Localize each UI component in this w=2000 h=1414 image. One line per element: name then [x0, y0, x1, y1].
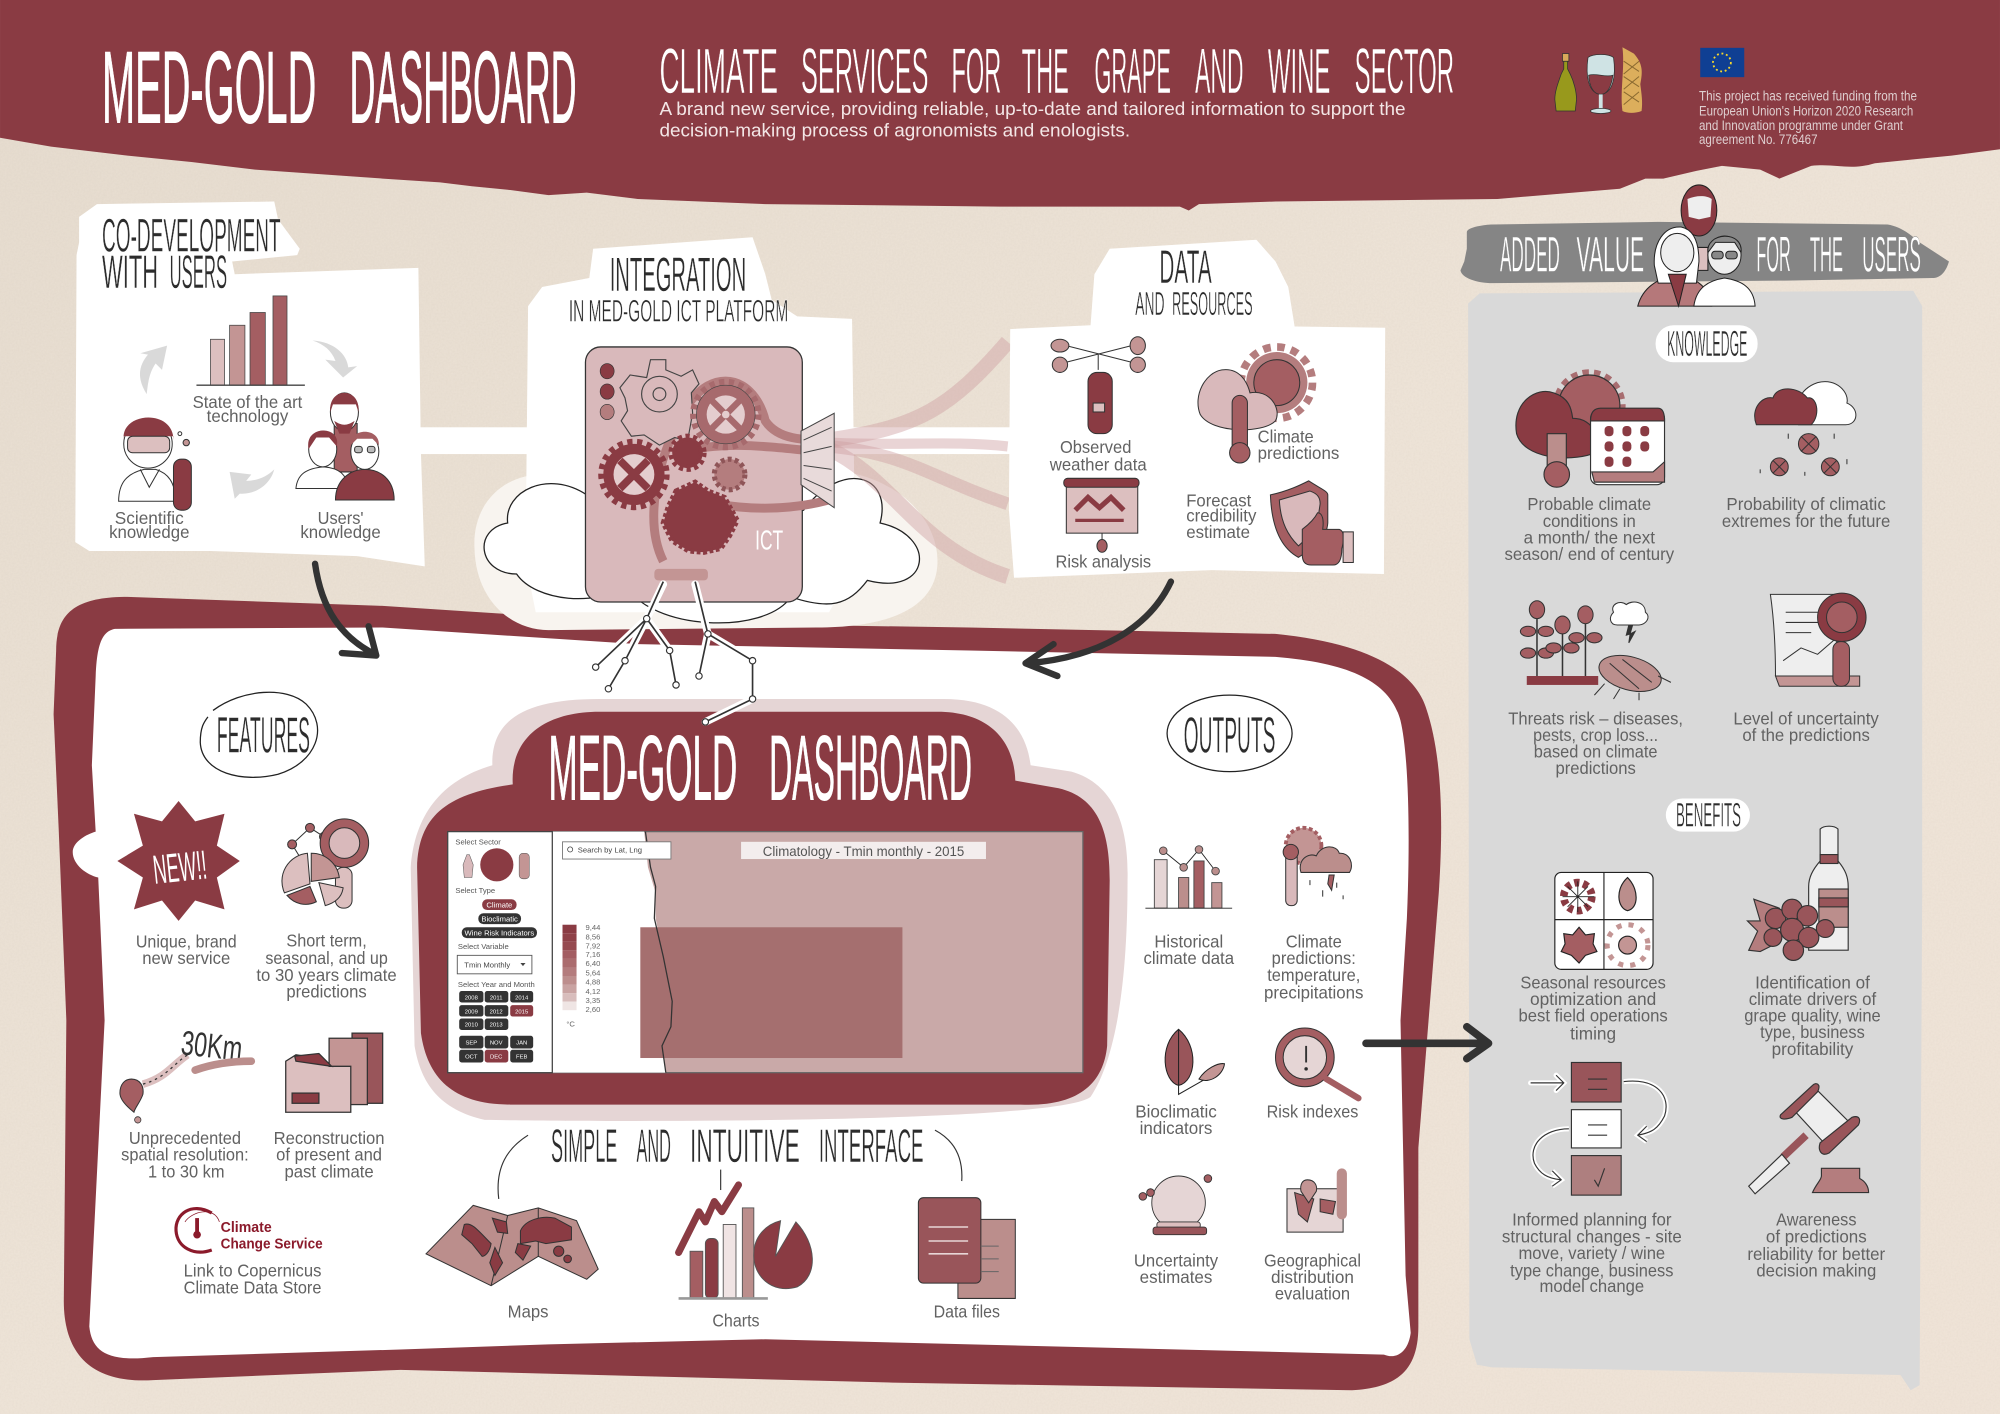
- panel: co-development with users: [75, 202, 425, 566]
- knowledge labels: Probable climate: [1527, 494, 1651, 514]
- header description: decision-making process of agronomists and enologists.: [659, 119, 1130, 140]
- feature labels: predictions: [286, 981, 367, 1001]
- icon: anemometer: [1051, 337, 1145, 434]
- icon: Climate Change Service logo: Change Service: [221, 1237, 323, 1253]
- year buttons: 2008: [465, 995, 478, 1001]
- icon: wine glass: [1587, 55, 1614, 114]
- year buttons: 2015: [515, 1009, 529, 1015]
- subtitle: GRAPE: [1094, 35, 1171, 107]
- benefits labels: of predictions: [1766, 1226, 1867, 1246]
- screen: Select Variable: [458, 942, 509, 951]
- header band: DASHBOARD: [350, 30, 577, 144]
- cloud: [484, 479, 919, 623]
- knowledge labels: [1504, 494, 1890, 778]
- output labels: Bioclimatic: [1135, 1101, 1217, 1121]
- knowledge pill: [1656, 324, 1758, 364]
- icon: map roll: [1287, 1168, 1347, 1232]
- heading: data: [1135, 241, 1253, 323]
- interface labels: Maps: [508, 1302, 548, 1322]
- icon: magnifier and pie: [282, 819, 369, 908]
- section: simple and intuitive interface: INTERFACE: [819, 1120, 923, 1173]
- banner text: ADDED: [1500, 227, 1560, 283]
- icon: map: [426, 1205, 598, 1286]
- benefits labels: model change: [1540, 1276, 1644, 1296]
- section: features: FEATURES: [217, 707, 310, 764]
- benefits labels: [1502, 972, 1885, 1296]
- features heading: [200, 692, 318, 777]
- knowledge labels: based on climate: [1534, 742, 1658, 762]
- highlighted map region: [640, 927, 902, 1058]
- map legend: 3,35: [585, 996, 600, 1005]
- heading: co-development: USERS: [170, 246, 227, 299]
- funding text: agreement No. 776467: [1699, 132, 1818, 147]
- feature labels: Climate Data Store: [184, 1277, 321, 1297]
- labels: Observed: [1060, 437, 1131, 457]
- year buttons: 2010: [465, 1023, 479, 1029]
- year buttons: [459, 991, 533, 1030]
- interface labels: [508, 1302, 1000, 1331]
- icon: cloud and snow: [1755, 382, 1856, 476]
- panel: added value: KNOWLEDGE: [1667, 324, 1747, 364]
- panel: added value: BENEFITS: [1676, 797, 1741, 835]
- interface heading: SIMPLE: [551, 1120, 617, 1173]
- map sea area: [552, 832, 672, 1073]
- labels: knowledge: [300, 522, 381, 542]
- icon: new badge: [117, 801, 240, 921]
- heading: co-development: WITH: [102, 246, 158, 299]
- main frame: [54, 597, 1441, 1390]
- icon: 30 km pin: 30Km: [179, 1024, 244, 1069]
- month buttons: DEC: [490, 1055, 503, 1061]
- month buttons: [459, 1036, 533, 1062]
- output labels: Geographical: [1264, 1251, 1361, 1271]
- heading: integration: INTEGRATION: [610, 248, 746, 302]
- icon: climate predictions: [1198, 347, 1312, 463]
- streams in tablet: [654, 381, 829, 561]
- map legend: 2,60: [585, 1005, 600, 1014]
- search box: Search by Lat, Lng: [578, 846, 642, 855]
- panel: added value: [1460, 185, 1949, 1390]
- icon: data files: [918, 1198, 1015, 1298]
- feature labels: to 30 years climate: [256, 965, 397, 985]
- panel: integration: IN MED-GOLD ICT PLATFORM: [569, 292, 788, 328]
- screen: Select Sector: [455, 837, 501, 846]
- benefits labels: Awareness: [1776, 1210, 1856, 1230]
- icon: crystal ball: [1139, 1175, 1212, 1235]
- labels: Risk analysis: [1055, 552, 1151, 572]
- dashboard block: [411, 699, 1128, 1121]
- month buttons: SEP: [465, 1041, 477, 1047]
- heading: data: AND: [1135, 286, 1165, 323]
- year buttons: 2011: [490, 995, 502, 1001]
- month buttons: NOV: [490, 1041, 503, 1047]
- small gears: [672, 437, 745, 490]
- banner text: FOR: [1756, 227, 1791, 283]
- icon: bar chart: [196, 296, 305, 385]
- map legend: 6,40: [585, 959, 600, 968]
- map title: Climatology - Tmin monthly - 2015: [763, 843, 964, 859]
- interface heading: AND: [636, 1120, 671, 1173]
- network connector: [592, 582, 756, 725]
- icon: thermometer and cloud: [1283, 828, 1351, 906]
- knowledge labels: season/ end of century: [1504, 544, 1674, 564]
- screen: Select Year and Month: [458, 980, 535, 989]
- search box: [563, 842, 671, 859]
- feature labels: Unique, brand: [136, 932, 237, 952]
- output labels: [1134, 932, 1364, 1304]
- benefits labels: reliability for better: [1747, 1244, 1885, 1264]
- labels: technology: [207, 406, 289, 426]
- feature labels: seasonal, and up: [265, 948, 388, 968]
- benefits labels: grape quality, wine: [1744, 1006, 1881, 1026]
- benefits labels: best field operations: [1518, 1006, 1668, 1026]
- feature labels: spatial resolution:: [121, 1145, 249, 1165]
- output labels: Risk indexes: [1267, 1101, 1358, 1121]
- benefits labels: Informed planning for: [1512, 1210, 1672, 1230]
- arrow: data to dashboard: [1026, 582, 1171, 676]
- screen: [448, 832, 1083, 1073]
- benefits pill: [1666, 797, 1750, 835]
- labels: knowledge: [109, 522, 189, 542]
- feature labels: [121, 930, 397, 1297]
- data streams: [829, 342, 1008, 577]
- output labels: estimates: [1140, 1267, 1212, 1287]
- map legend: °C: [566, 1020, 575, 1029]
- icon: charts: [679, 1185, 812, 1298]
- benefits labels: Identification of: [1755, 972, 1870, 992]
- section: simple and intuitive interface: [426, 1120, 1015, 1331]
- banner text: THE: [1810, 227, 1843, 283]
- banner text: VALUE: [1577, 227, 1644, 283]
- feature labels: 1 to 30 km: [148, 1161, 225, 1181]
- funding text: [1699, 89, 1917, 147]
- year buttons: 2014: [515, 995, 529, 1001]
- type pills: [462, 899, 537, 938]
- subtitle: THE: [1022, 35, 1069, 107]
- map legend: 7,92: [585, 941, 600, 950]
- feature labels: new service: [142, 948, 230, 968]
- knowledge labels: Probability of climatic: [1726, 494, 1886, 514]
- icon: users: [296, 393, 394, 500]
- icon: folder: [286, 1033, 383, 1112]
- year buttons: 2013: [490, 1023, 503, 1029]
- map legend: 7,16: [585, 950, 600, 959]
- feature labels: Unprecedented: [129, 1128, 241, 1148]
- feature labels: Reconstruction: [274, 1128, 385, 1148]
- icon: flow chart: [1531, 1062, 1666, 1195]
- screen: Select Type: [455, 886, 495, 895]
- output labels: Climate: [1286, 932, 1342, 952]
- type pills: Wine Risk Indicators: [465, 929, 534, 938]
- output labels: precipitations: [1264, 983, 1364, 1003]
- interface labels: Charts: [712, 1311, 760, 1331]
- icon: gavel: [1749, 1084, 1869, 1194]
- type pills: Bioclimatic: [481, 915, 518, 924]
- labels: Users': [318, 508, 364, 528]
- feature labels: of present and: [276, 1145, 382, 1165]
- sector icons: [463, 848, 529, 881]
- knowledge labels: Threats risk – diseases,: [1508, 708, 1683, 728]
- month buttons: JAN: [516, 1041, 527, 1047]
- knowledge labels: pests, crop loss...: [1533, 725, 1658, 745]
- icon: bottle and grapes: [1747, 826, 1848, 960]
- benefits labels: type change, business: [1510, 1261, 1673, 1281]
- icon: EU flag: [1700, 48, 1744, 77]
- icon: leaves: [1165, 1029, 1224, 1094]
- icon: ICT tablet: [585, 347, 829, 602]
- icon: shield with thumb: [1270, 481, 1353, 565]
- subtitle: WINE: [1268, 35, 1330, 107]
- banner text: [1500, 227, 1921, 283]
- map legend: 5,64: [585, 969, 601, 978]
- icon: oil bottle: [1555, 54, 1577, 111]
- labels: Forecast: [1186, 490, 1251, 510]
- funding text: European Union's Horizon 2020 Research: [1699, 103, 1913, 118]
- interface labels: Data files: [934, 1302, 1000, 1322]
- benefits labels: optimization and: [1530, 989, 1656, 1009]
- icon: cycle arrows: [140, 341, 357, 499]
- year buttons: 2009: [465, 1009, 478, 1015]
- panel: data and resources: [1009, 240, 1385, 578]
- icon: three users: [1638, 185, 1755, 306]
- year buttons: 2012: [490, 1009, 503, 1015]
- dashboard block: DASHBOARD: [769, 718, 972, 820]
- benefits labels: structural changes - site: [1502, 1226, 1682, 1246]
- gear light: [620, 360, 699, 445]
- header description: [659, 98, 1406, 140]
- arrow: co-development to dashboard: [315, 564, 376, 656]
- icon: scientist: [119, 418, 191, 510]
- output labels: Historical: [1154, 932, 1223, 952]
- large gear blob: [663, 482, 737, 552]
- output labels: distribution: [1271, 1267, 1354, 1287]
- knowledge labels: a month/ the next: [1524, 527, 1655, 547]
- icon: fringe: [801, 413, 834, 508]
- header description: A brand new service, providing reliable, up-to-date and tailored information to support the: [659, 98, 1406, 119]
- map legend: 4,88: [585, 978, 600, 987]
- grey panel: [1468, 291, 1922, 1390]
- dropdown: [457, 955, 532, 974]
- header band: SECTOR: [1355, 35, 1454, 107]
- funding text: and Innovation programme under Grant: [1699, 118, 1903, 133]
- dots: [600, 364, 614, 420]
- tablet foot: [654, 569, 708, 580]
- map legend: [563, 923, 601, 1029]
- feature labels: Short term,: [286, 930, 367, 950]
- knowledge labels: Level of uncertainty: [1733, 708, 1879, 728]
- knowledge labels: conditions in: [1543, 511, 1636, 531]
- output labels: climate data: [1143, 948, 1234, 968]
- heading: integration: [569, 248, 788, 328]
- heading: data: DATA: [1159, 241, 1212, 294]
- section: outputs: OUTPUTS: [1184, 707, 1276, 764]
- interface heading: [551, 1120, 923, 1173]
- map legend: 8,56: [585, 932, 600, 941]
- section: features: [117, 692, 397, 1297]
- panel: integration: [474, 237, 1008, 630]
- banner: [1460, 222, 1949, 283]
- labels: [1049, 427, 1339, 572]
- knowledge labels: extremes for the future: [1722, 511, 1890, 531]
- heading: co-development: [102, 209, 281, 299]
- interface heading: INTUITIVE: [690, 1120, 800, 1173]
- icon: seasons grid: [1555, 872, 1653, 969]
- labels: State of the art: [193, 392, 303, 412]
- benefits labels: decision making: [1756, 1261, 1876, 1281]
- benefits labels: move, variety / wine: [1518, 1243, 1665, 1263]
- ICT label: ICT: [755, 525, 783, 556]
- labels: weather data: [1049, 455, 1147, 475]
- subtitle: SERVICES: [801, 35, 929, 107]
- icon: climate calendar: [1516, 372, 1665, 487]
- knowledge labels: of the predictions: [1742, 725, 1870, 745]
- icon: historical bars: [1145, 846, 1232, 908]
- funding text: This project has received funding from the: [1699, 89, 1917, 104]
- map legend: 9,44: [585, 923, 601, 932]
- output labels: indicators: [1140, 1118, 1212, 1138]
- output labels: temperature,: [1267, 965, 1360, 985]
- subtitle: CLIMATE: [659, 35, 778, 107]
- panel: data and resources: RESOURCES: [1172, 286, 1253, 323]
- labels: estimate: [1186, 522, 1250, 542]
- output labels: predictions:: [1272, 948, 1356, 968]
- month buttons: OCT: [465, 1055, 478, 1061]
- labels: credibility: [1186, 506, 1257, 526]
- labels: Scientific: [115, 508, 184, 528]
- dashboard title: MED-GOLD: [548, 718, 737, 820]
- panel: co-development with users: CO-DEVELOPMENT: [102, 209, 281, 262]
- section: outputs: [1134, 695, 1364, 1304]
- bracket lines: [498, 1130, 962, 1199]
- gear rose: [694, 383, 758, 446]
- icon: risk magnifier: [1276, 1028, 1358, 1098]
- feature labels: past climate: [284, 1161, 374, 1181]
- outputs heading: [1167, 695, 1292, 772]
- icon: plants and pest: [1520, 601, 1671, 700]
- icon: uncertainty paper: [1770, 593, 1866, 686]
- subtitle: [659, 35, 1454, 107]
- icon: Climate Change Service logo: Climate: [221, 1220, 272, 1236]
- subtitle: FOR: [952, 35, 1001, 107]
- benefits labels: climate drivers of: [1749, 989, 1876, 1009]
- arrow: outputs to added value: [1366, 1027, 1489, 1059]
- feature labels: Link to Copernicus: [184, 1261, 321, 1281]
- labels: Climate: [1258, 427, 1314, 447]
- icon: new badge: NEW!!: [151, 842, 209, 893]
- benefits labels: timing: [1570, 1024, 1616, 1044]
- benefits labels: profitability: [1772, 1039, 1854, 1059]
- gear wine: [602, 443, 666, 506]
- icon: braided wheat: [1622, 47, 1642, 113]
- sidebar: [448, 832, 552, 1073]
- subtitle: AND: [1195, 35, 1244, 107]
- type pills: Climate: [486, 901, 512, 910]
- labels: [109, 392, 381, 542]
- output labels: Uncertainty: [1134, 1251, 1218, 1271]
- output labels: evaluation: [1275, 1284, 1350, 1304]
- map legend: 4,12: [585, 987, 600, 996]
- month buttons: FEB: [516, 1055, 527, 1061]
- icon: risk board: [1064, 478, 1139, 552]
- connector bars between panels: [415, 427, 1014, 454]
- header band: [0, 0, 2000, 210]
- icon: Climate Change Service logo: [176, 1209, 323, 1253]
- benefits labels: Seasonal resources: [1520, 972, 1666, 992]
- dropdown: Tmin Monthly: [464, 960, 510, 969]
- title: MED-GOLD: [102, 30, 316, 144]
- labels: predictions: [1258, 443, 1339, 463]
- benefits labels: type, business: [1760, 1022, 1865, 1042]
- icon: 30 km pin: [120, 1024, 251, 1123]
- knowledge labels: predictions: [1555, 758, 1636, 778]
